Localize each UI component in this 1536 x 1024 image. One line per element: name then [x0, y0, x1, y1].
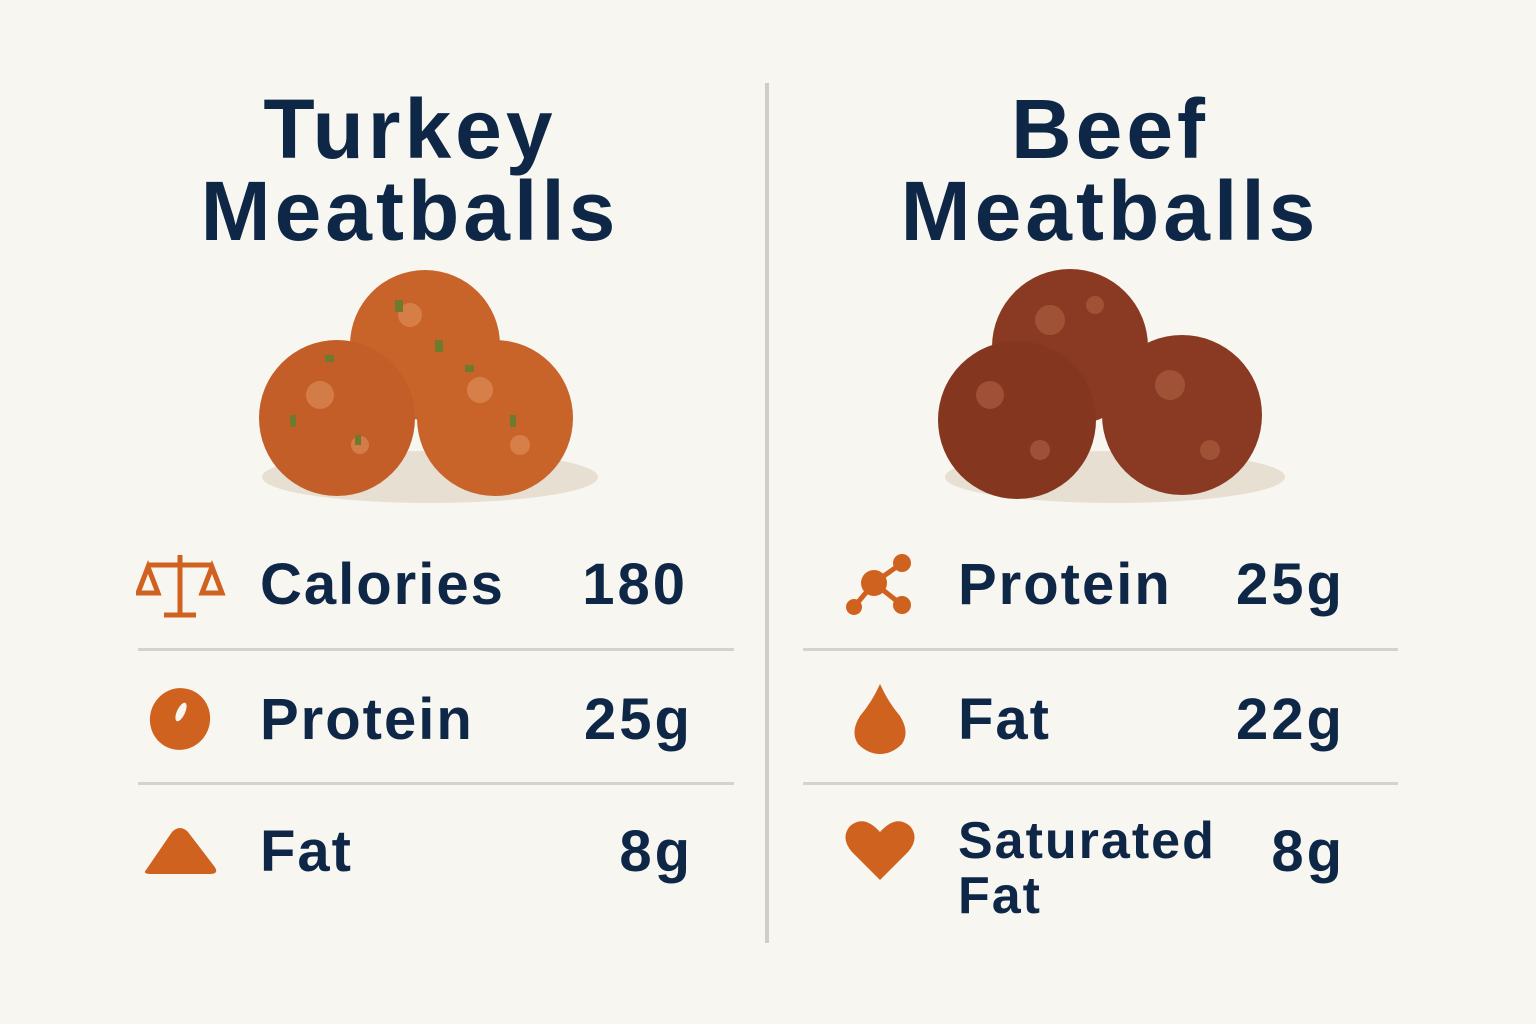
value: 22g — [1236, 687, 1345, 752]
icon: molecule — [846, 554, 911, 615]
icon: mound — [144, 828, 216, 874]
icon: scale — [136, 555, 226, 618]
title: turkey: Turkey — [263, 82, 557, 176]
title: turkey: Meatballs — [201, 164, 619, 258]
icon: drop — [854, 684, 906, 754]
label: Fat — [958, 867, 1042, 925]
value: 180 — [582, 552, 688, 617]
title: beef — [901, 82, 1319, 258]
label: Protein — [260, 687, 474, 752]
row: beef protein — [846, 552, 1345, 617]
icon: bean — [150, 688, 210, 750]
label: Protein — [958, 552, 1172, 617]
divider — [765, 83, 769, 943]
icon: heart — [845, 821, 915, 880]
title: beef: Beef — [1011, 82, 1209, 176]
row: beef fat — [854, 684, 1345, 754]
value: 25g — [1236, 552, 1345, 617]
title: turkey — [201, 82, 619, 258]
value: 25g — [584, 687, 693, 752]
label: Saturated — [958, 812, 1216, 870]
row: calories — [136, 552, 688, 618]
title: beef: Meatballs — [901, 164, 1319, 258]
row: turkey fat — [144, 819, 693, 884]
label: Fat — [260, 819, 353, 884]
illustration: beef meatballs — [938, 269, 1285, 503]
value: 8g — [1271, 819, 1345, 884]
value: 8g — [619, 819, 693, 884]
illustration: turkey meatballs — [259, 270, 598, 503]
row: saturated fat — [845, 812, 1345, 925]
row: turkey protein — [150, 687, 693, 752]
label: Calories — [260, 552, 505, 617]
label: Fat — [958, 687, 1051, 752]
label — [958, 812, 1216, 925]
